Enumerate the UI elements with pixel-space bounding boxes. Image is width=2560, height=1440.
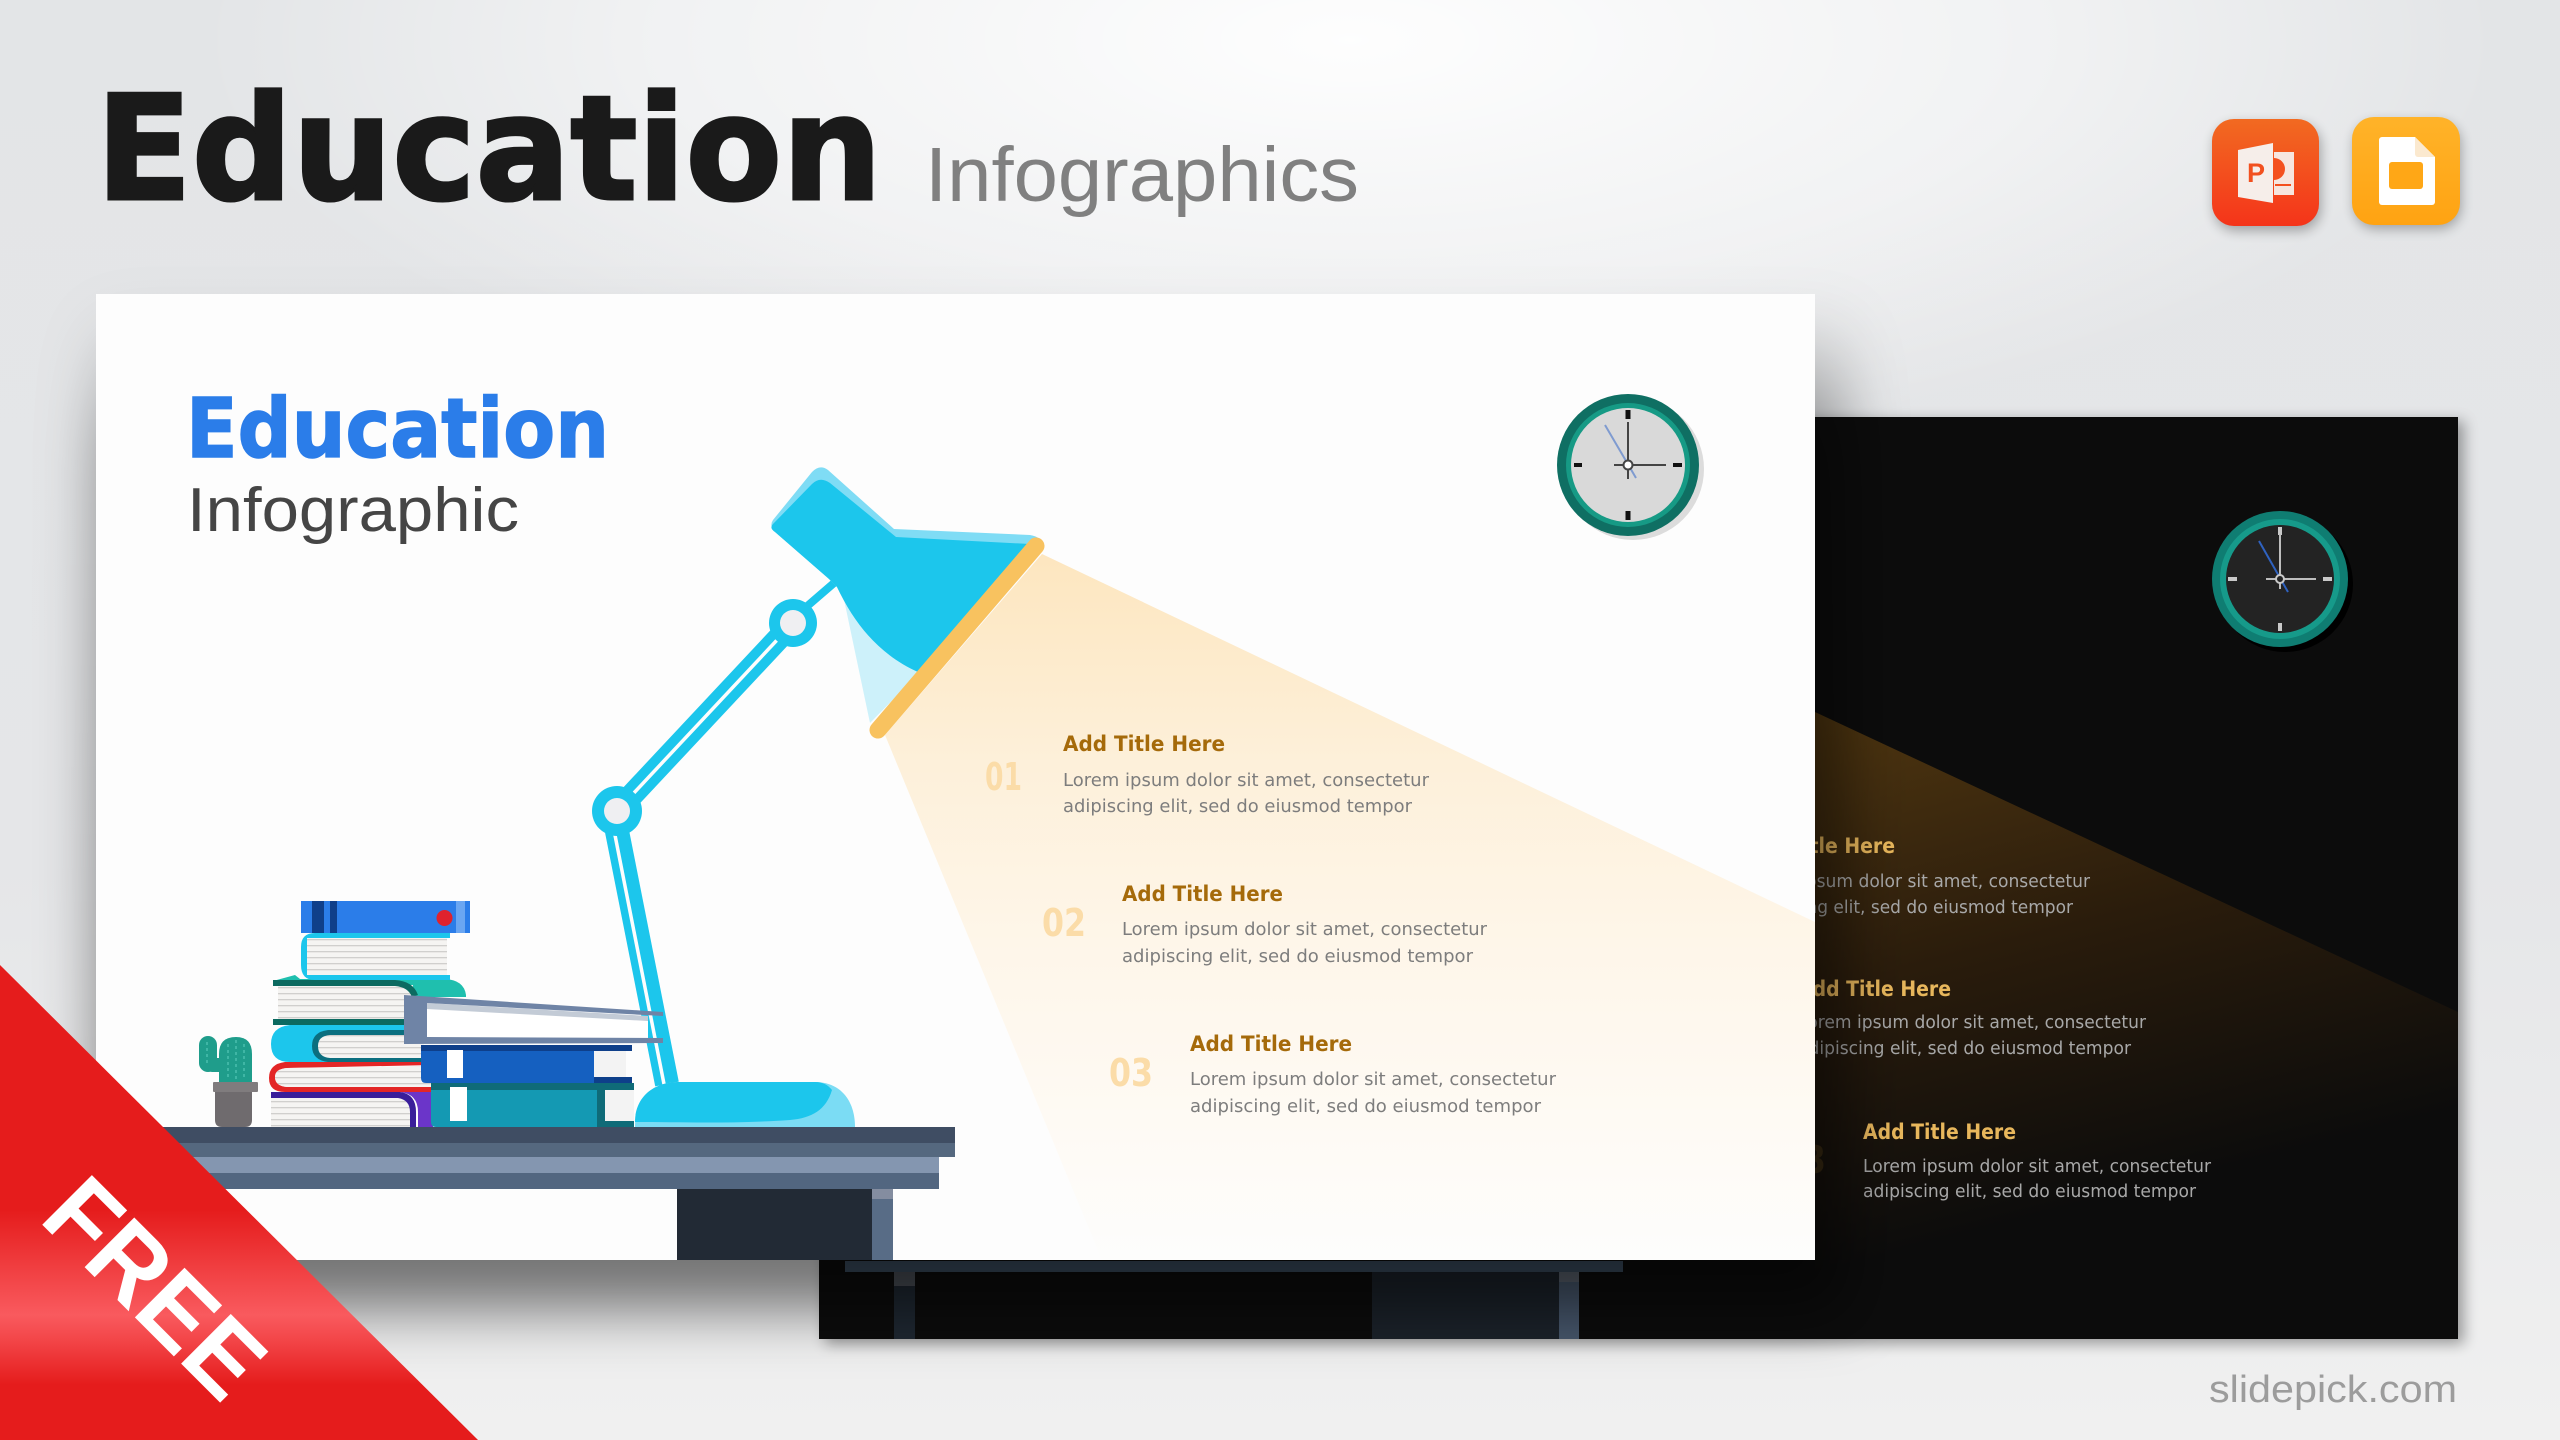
item 03: 03: [1109, 1051, 1153, 1095]
book: purple: [271, 1092, 433, 1127]
book: flat teal: [431, 1083, 634, 1127]
clock: [1557, 394, 1704, 540]
item 01: adipiscing elit, sed do eiusmod tempor: [1063, 796, 1413, 817]
lamp rim: [878, 546, 1036, 730]
item 02: Add Title Here: [1122, 882, 1283, 906]
subtitle: Infographics: Infographics: [925, 132, 1359, 218]
icon: PowerPoint: P: [2247, 158, 2265, 188]
ribbon: FREE: [0, 965, 478, 1440]
book: cyan: [271, 1025, 424, 1062]
book: grey open: [404, 995, 663, 1044]
item 01: 01: [985, 755, 1022, 799]
cactus: [199, 1036, 258, 1127]
item 03: [1109, 1032, 1557, 1117]
dark item 02: Add Title Here: [1798, 977, 1951, 1001]
item 02: [1042, 882, 1488, 967]
book: teal: [273, 975, 466, 1025]
dark item 03: [1863, 1120, 2212, 1202]
heading: Education: Education: [186, 382, 609, 477]
watermark: slidepick.com: [2209, 1369, 2457, 1411]
desk: [150, 1127, 955, 1260]
item 03: Lorem ipsum dolor sit amet, consectetur: [1190, 1069, 1557, 1090]
dark clock: [2212, 511, 2353, 652]
dark item 01: adipiscing elit, sed do eiusmod tempor: [1742, 897, 2074, 918]
book: flat blue: [421, 1045, 632, 1083]
dark item 02: [1798, 977, 2147, 1059]
heading: Infographic: Infographic: [187, 476, 519, 545]
lamp lower arm: [613, 811, 667, 1084]
title: Education: Education: [96, 65, 882, 234]
lamp joints: [592, 599, 817, 836]
lamp base: [635, 1082, 855, 1127]
panel: light slide: [96, 294, 1815, 1260]
book: cyan with pages: [301, 933, 450, 980]
lamp head: [771, 467, 1042, 672]
dark item 03: adipiscing elit, sed do eiusmod tempor: [1863, 1181, 2197, 1202]
lamp upper arm: [617, 583, 834, 811]
item 03: Add Title Here: [1190, 1032, 1352, 1056]
dark item 02: Lorem ipsum dolor sit amet, consectetur: [1798, 1012, 2147, 1033]
dark table: [845, 1261, 1623, 1339]
item 01: [985, 732, 1430, 817]
lamp head inner: [842, 590, 920, 723]
dark item 03 number: 03: [1781, 1138, 1826, 1182]
dark item 03: Add Title Here: [1863, 1120, 2016, 1144]
dark item 01: [1742, 834, 2091, 918]
book: blue top: [301, 901, 470, 933]
dark item 01: Lorem ipsum dolor sit amet, consectetur: [1742, 871, 2091, 892]
lamp: [592, 467, 1042, 1127]
stacked books: [269, 901, 663, 1127]
item 02: adipiscing elit, sed do eiusmod tempor: [1122, 946, 1474, 967]
dark item 01: Add Title Here: [1742, 834, 1895, 858]
book: red: [269, 1062, 433, 1092]
item 01: Lorem ipsum dolor sit amet, consectetur: [1063, 770, 1430, 791]
dark item 02: adipiscing elit, sed do eiusmod tempor: [1798, 1038, 2132, 1059]
light beam: [885, 554, 1815, 1260]
icon: Google Slides: [2352, 117, 2461, 229]
panel: dark slide: [819, 417, 2464, 1344]
item 02: Lorem ipsum dolor sit amet, consectetur: [1122, 919, 1488, 940]
icon: PowerPoint: [2212, 119, 2321, 231]
item 02: 02: [1042, 901, 1086, 945]
item 01: Add Title Here: [1063, 732, 1225, 756]
item 03: adipiscing elit, sed do eiusmod tempor: [1190, 1096, 1542, 1117]
panel: light slide shadow: [100, 310, 1845, 1310]
dark item 03: Lorem ipsum dolor sit amet, consectetur: [1863, 1156, 2212, 1177]
dark light beam: [1815, 712, 2458, 1339]
ribbon: FREE: FREE: [22, 1155, 288, 1421]
